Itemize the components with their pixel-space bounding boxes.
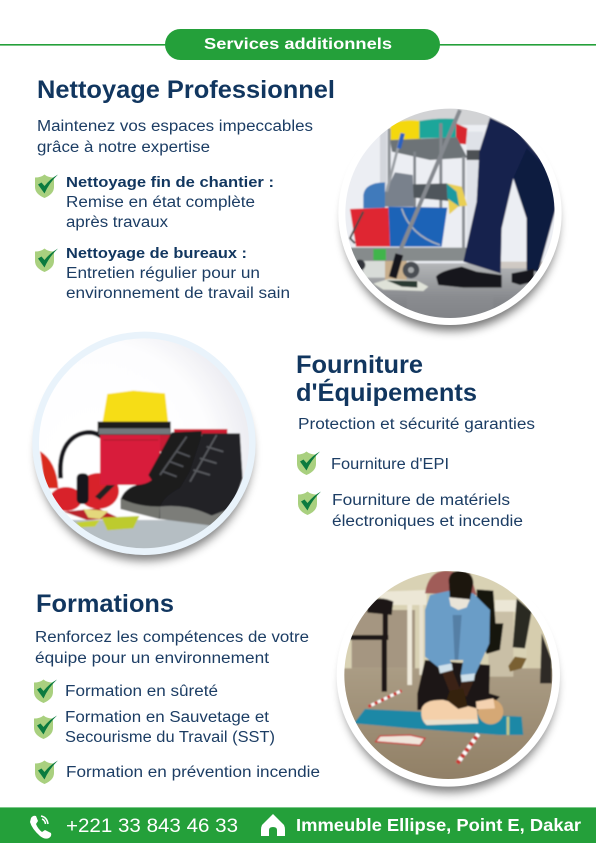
footer bar [0, 807, 596, 843]
heading: fourniture [296, 351, 477, 407]
list item: bureaux: Nettoyage de bureaux : [66, 245, 247, 262]
list item: bureaux [66, 245, 290, 302]
heading: fourniture: d'Équipements [296, 378, 477, 407]
intro text: formations: équipe pour un environnement [35, 650, 270, 667]
heading: fourniture: Fourniture [296, 351, 423, 379]
panel: nettoyage professionnel [35, 76, 335, 302]
list item: EPI: Fourniture d'EPI [331, 456, 449, 473]
icon: shield check [35, 760, 58, 784]
list item: bureaux: Entretien régulier pour un [66, 265, 260, 282]
photo: first aid training [330, 560, 570, 800]
address: Immeuble Ellipse, Point E, Dakar [296, 815, 581, 835]
icon: phone [30, 816, 51, 839]
phone number: +221 33 843 46 33 [66, 816, 238, 837]
list item: SST: Formation en Sauvetage et [65, 709, 270, 726]
icon: shield check [35, 248, 58, 272]
intro text: nettoyage: grâce à notre expertise [37, 139, 210, 156]
intro text: nettoyage [37, 118, 313, 156]
icon: house [261, 814, 285, 836]
list item: surete: Formation en sûreté [65, 683, 218, 700]
list item: materiels: électroniques et incendie [332, 513, 523, 530]
panel: fourniture d'equipements [296, 351, 535, 530]
list item: fin de chantier: Remise en état complète [66, 194, 255, 211]
intro text: formations: Renforcez les compétences de votre [35, 629, 309, 646]
heading: nettoyage: Nettoyage Professionnel [37, 76, 335, 104]
list item: fin de chantier: Nettoyage fin de chantier : [66, 174, 274, 191]
list item: incendie: Formation en prévention incendie [66, 764, 320, 781]
icon: shield check [297, 452, 320, 475]
list item: fin de chantier [66, 174, 274, 231]
intro text: formations [35, 629, 309, 667]
list item: materiels: Fourniture de matériels [332, 492, 510, 509]
intro text: nettoyage: Maintenez vos espaces impeccables [37, 118, 313, 135]
intro text: fourniture: Protection et sécurité garanties [298, 416, 535, 433]
list item: SST: Secourisme du Travail (SST) [65, 729, 275, 746]
photo: safety equipment [20, 325, 265, 565]
panel: formations [34, 590, 320, 784]
icon: shield check [34, 680, 57, 703]
header banner: Services additionnels [204, 36, 392, 53]
list item: SST [65, 709, 275, 746]
heading: formations: Formations [36, 590, 174, 618]
icon: shield check [35, 174, 58, 198]
header banner [0, 29, 596, 60]
list item: fin de chantier: après travaux [66, 214, 168, 231]
icon: shield check [34, 716, 57, 739]
list item: materiels [332, 492, 523, 530]
list item: bureaux: environnement de travail sain [66, 285, 290, 302]
icon: shield check [298, 492, 321, 515]
photo: cleaning cart and worker [330, 95, 570, 335]
